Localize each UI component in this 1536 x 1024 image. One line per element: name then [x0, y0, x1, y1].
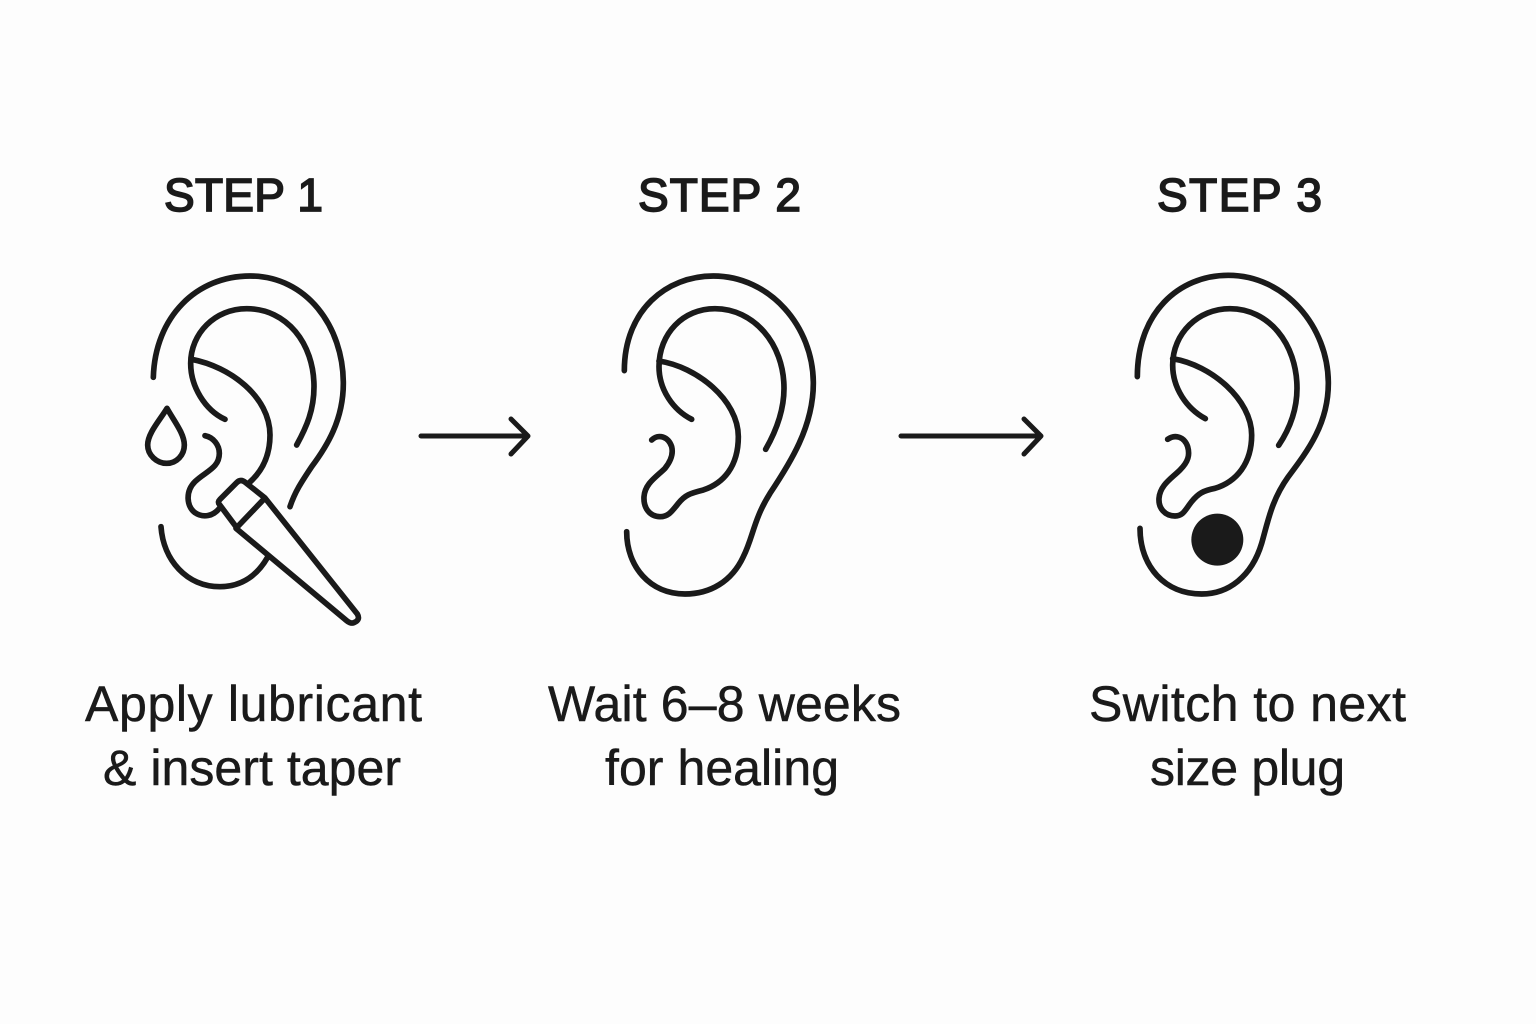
- text: step 1 description: Apply lubricant: [85, 676, 422, 732]
- icon: ear with lubricant drop and taper: [148, 276, 358, 623]
- text: step 2 description: [548, 676, 901, 796]
- heading: step 1: STEP 1: [164, 169, 323, 221]
- text: step 1 description: & insert taper: [103, 740, 401, 796]
- text: step 3 description: size plug: [1150, 740, 1345, 796]
- arrow: step 2 to step 3: [901, 419, 1041, 454]
- icon: lubricant drop: [148, 408, 184, 463]
- heading: step 2: STEP 2: [638, 169, 801, 221]
- text: step 3 description: Switch to next: [1089, 676, 1406, 732]
- heading: step 3: STEP 3: [1157, 169, 1322, 221]
- icon: taper: [218, 480, 358, 623]
- icon: healing ear: [624, 276, 813, 594]
- arrow: step 1 to step 2: [421, 419, 528, 454]
- text: step 2 description: for healing: [605, 740, 839, 796]
- text: step 2 description: Wait 6–8 weeks: [548, 676, 901, 732]
- text: step 3 description: [1089, 676, 1406, 796]
- icon: ear with plug: [1137, 275, 1328, 594]
- icon: plug: [1191, 514, 1243, 566]
- text: step 1 description: [85, 676, 422, 796]
